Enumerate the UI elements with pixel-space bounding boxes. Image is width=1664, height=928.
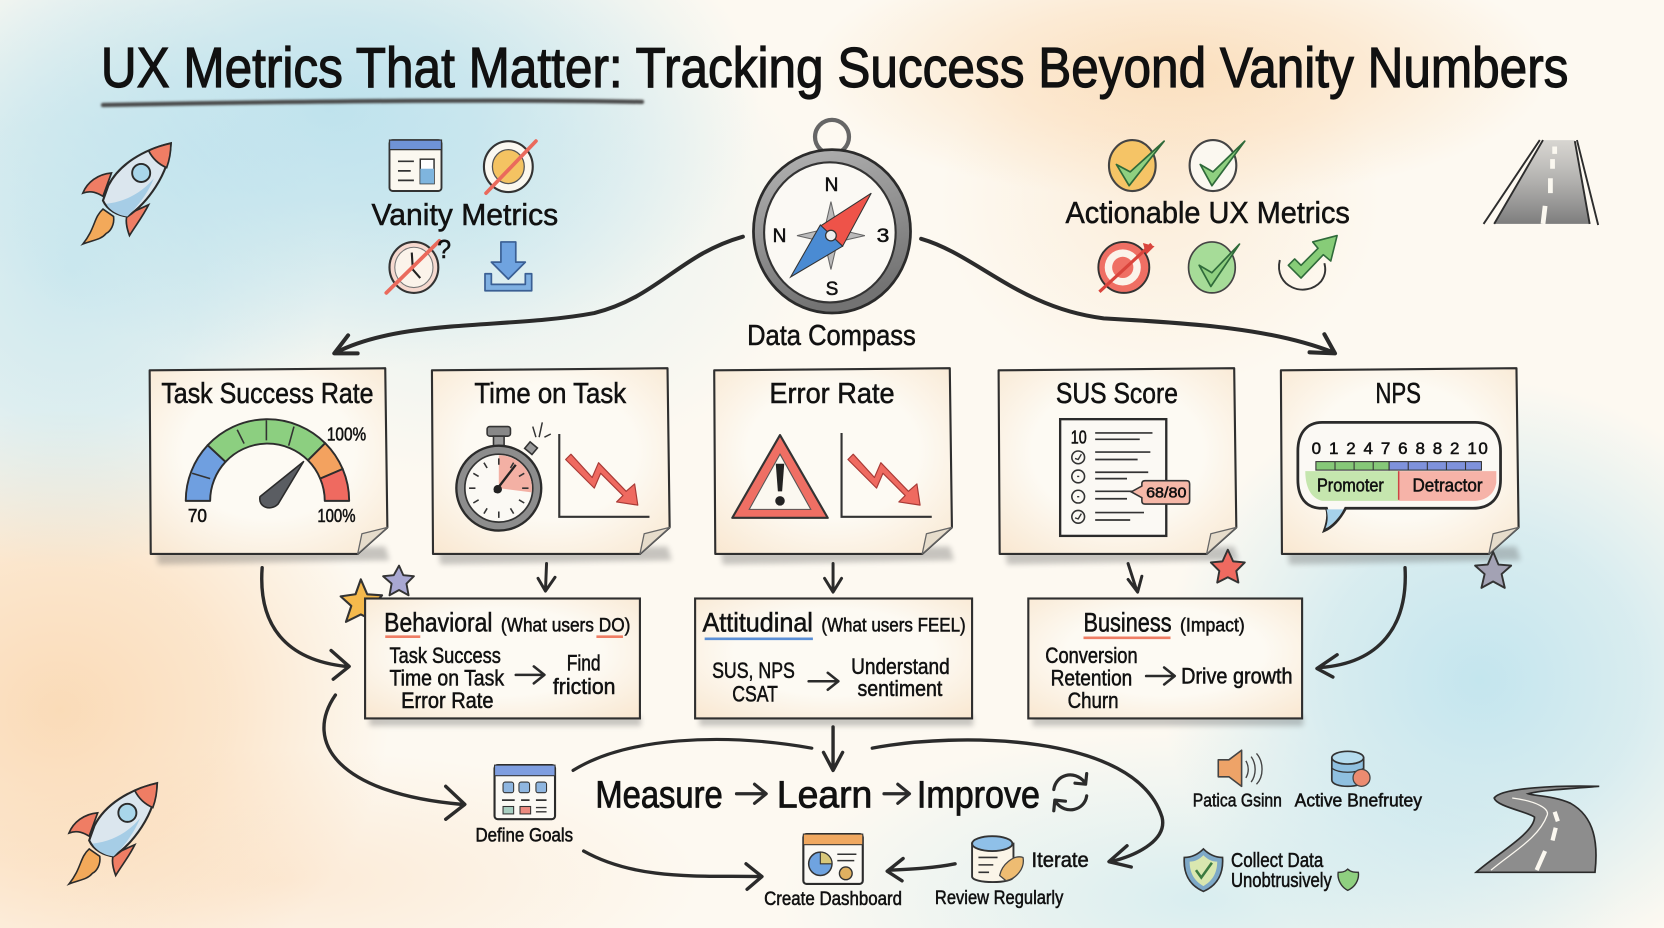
heading: SUS Score (1056, 378, 1178, 410)
heading: NPS (1375, 378, 1421, 410)
icon: data compass: 3 (877, 226, 889, 247)
panel: sus score (999, 368, 1238, 565)
arrow (809, 673, 838, 690)
arrow (1146, 667, 1175, 684)
heading: Time on Task (474, 378, 627, 410)
icon: speaker (1218, 750, 1262, 786)
panel: attitudinal (695, 599, 973, 726)
cycle: measure learn improve (595, 774, 1087, 817)
icon: nps speech bubble: Detractor (1412, 475, 1483, 495)
arrow: compass to right cards (921, 239, 1335, 353)
icon: winding road (1476, 786, 1599, 872)
outcome: Understand (851, 654, 950, 679)
icon: data compass (753, 120, 911, 313)
gauge chart (186, 419, 366, 526)
arrow: define goals to dashboard (584, 851, 762, 889)
metric list: Time on Task (389, 666, 505, 691)
outcome (851, 654, 950, 701)
arrow: loop to iterate (872, 740, 1163, 867)
heading: actionable ux metrics: Actionable UX Metrics (1065, 195, 1350, 230)
icon: outline check (1190, 140, 1245, 191)
icon: create dashboard (803, 834, 863, 884)
title underline (103, 101, 642, 105)
icon: target (1098, 242, 1155, 293)
cycle: measure learn improve: Measure (595, 774, 723, 817)
outcome: friction (553, 674, 616, 699)
star: gold (341, 579, 382, 622)
icon: crossed-out clock (386, 236, 451, 293)
panel: actionable metrics (1065, 140, 1350, 293)
icon: gold check (1109, 140, 1164, 191)
heading: vanity metrics: Vanity Metrics (371, 197, 558, 232)
star: red (1211, 550, 1245, 583)
icon: straight road (1484, 140, 1598, 225)
metric list (1045, 643, 1138, 713)
icon: stopwatch (456, 422, 551, 531)
text: collect data unobtrusively: Collect Data (1231, 850, 1324, 872)
arrow (516, 666, 544, 683)
arrow: categories to cycle (824, 727, 843, 770)
metric list: CSAT (732, 681, 778, 706)
label: define goals: Define Goals (475, 826, 573, 847)
subheading: (What users FEEL) (821, 615, 966, 636)
icon: data compass: N (773, 226, 786, 247)
label: create dashboard: Create Dashboard (764, 889, 902, 910)
panel: business (1028, 599, 1303, 726)
gauge chart: 100% (317, 506, 356, 526)
chart: falling time (559, 434, 649, 517)
icon: download (485, 242, 532, 291)
metric list: Retention (1051, 666, 1132, 691)
heading: Business (1083, 607, 1172, 637)
panel: nps (1281, 368, 1521, 565)
icon: nps speech bubble: Promoter (1317, 475, 1384, 495)
small arrows: cards to categories (538, 563, 1142, 592)
metric list: SUS, NPS (712, 658, 795, 683)
icon: crossed-out clock: ? (437, 236, 451, 264)
icon: data compass: S (826, 279, 838, 300)
heading: Task Success Rate (161, 378, 374, 410)
icon: green check (1189, 242, 1239, 293)
metric list: Conversion (1045, 643, 1138, 668)
icon: small shield (1338, 869, 1359, 890)
outcome (553, 651, 616, 699)
heading: Behavioral (384, 607, 492, 637)
outcome: Drive growth (1181, 663, 1293, 688)
arrow: review to dashboard (887, 858, 955, 881)
arrow: task success to behavioral (262, 568, 349, 679)
panel: behavioral (365, 599, 641, 726)
icon: crossed-out coin (484, 141, 536, 193)
subheading: (Impact) (1180, 615, 1245, 636)
panel: error rate (714, 368, 954, 565)
heading: Error Rate (769, 378, 895, 410)
arrow: compass to left cards (334, 237, 743, 353)
icon: sus questionnaire: 10 (1071, 428, 1087, 448)
cycle: measure learn improve: Learn (777, 774, 872, 817)
label: iterate: Iterate (1032, 849, 1089, 872)
heading: Attitudinal (703, 607, 813, 637)
gauge chart: 100% (327, 424, 366, 444)
star: grey (1475, 552, 1511, 588)
outcome: Find (567, 651, 601, 676)
cycle: measure learn improve: Improve (917, 774, 1040, 817)
label: data compass: Data Compass (747, 320, 916, 352)
icon: data cylinder (1332, 751, 1370, 786)
metric list: Churn (1068, 688, 1119, 713)
label: review regularly: Review Regularly (935, 888, 1064, 909)
icon: large shield (1184, 849, 1223, 891)
icon: rocket top left (83, 143, 171, 244)
metric list: Error Rate (401, 688, 493, 713)
icon: sus questionnaire (1060, 419, 1190, 536)
outcome: sentiment (857, 676, 943, 701)
star: purple (383, 566, 414, 595)
icon: nps speech bubble: 0 1 2 4 7 6 8 8 2 10 (1312, 439, 1488, 458)
metric list: Task Success (389, 643, 501, 668)
icon: warning triangle (732, 435, 828, 518)
label: active method: Active Bnefrutey (1295, 790, 1422, 810)
icon: define goals dashboard (495, 765, 555, 819)
metric list (712, 658, 795, 706)
icon: review database (972, 836, 1023, 882)
icon: rocket bottom left (69, 783, 157, 884)
metric list (389, 643, 505, 713)
icon: refresh (1054, 774, 1087, 811)
text: collect data unobtrusively (1231, 850, 1333, 892)
subheading: (What users DO) (501, 615, 630, 636)
text: collect data unobtrusively: Unobtrusively (1231, 870, 1333, 892)
panel: vanity metrics (371, 140, 558, 293)
icon: browser page (389, 140, 441, 191)
arrow: nps to business (1317, 568, 1405, 677)
icon: data compass: N (825, 175, 838, 196)
arrow: behavioral to define goals (324, 695, 465, 819)
icon: sus questionnaire: 68/80 (1146, 486, 1186, 502)
icon: nps speech bubble (1298, 422, 1501, 531)
icon: rising arrow check (1279, 236, 1337, 290)
chart: falling errors (842, 433, 932, 517)
gauge chart: 70 (188, 506, 207, 526)
panel: task success rate (150, 368, 389, 565)
panel: time on task (432, 368, 672, 565)
label: passive method: Patica Gsinn (1193, 790, 1282, 810)
arc: define goals to learn (573, 739, 812, 770)
